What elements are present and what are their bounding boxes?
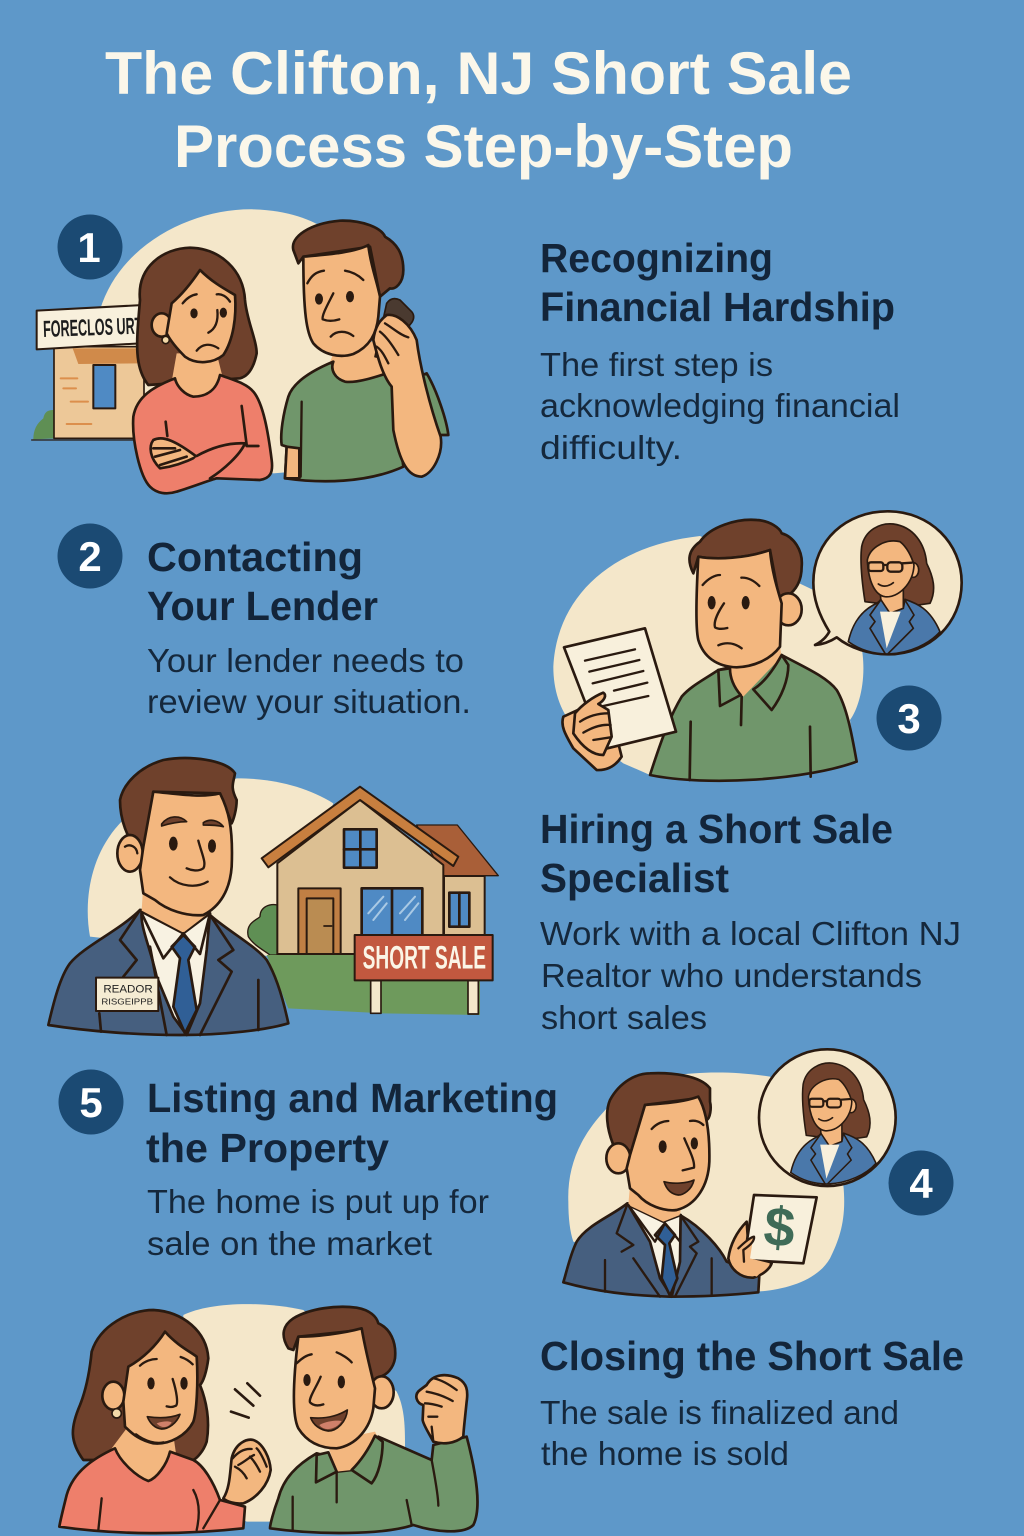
badge: step 2: 2 bbox=[78, 533, 102, 580]
house with short sale sign bbox=[248, 787, 498, 1015]
text block: step 3: short sales bbox=[541, 999, 707, 1036]
badge: step 4: 4 bbox=[909, 1160, 933, 1207]
text block: step 3: Realtor who understands bbox=[541, 957, 922, 994]
icon: dollar sheet in hand bbox=[728, 1195, 817, 1278]
text block: step 3: Work with a local Clifton NJ bbox=[540, 915, 961, 952]
text block: step 2 bbox=[147, 534, 471, 720]
icon: dollar sheet in hand: $ bbox=[761, 1195, 797, 1259]
text block: step 3: Hiring a Short Sale bbox=[540, 806, 893, 852]
badge: step 1: 1 bbox=[77, 224, 101, 271]
title bbox=[105, 40, 852, 180]
badge: step 1 bbox=[58, 214, 122, 280]
man on the phone bbox=[281, 221, 448, 481]
text block: step 1: Recognizing bbox=[540, 235, 773, 281]
speech bubble with specialist bbox=[813, 511, 962, 654]
text block: step 3: Specialist bbox=[540, 855, 729, 901]
badge: step 5 bbox=[58, 1070, 124, 1134]
illustration: man reading a letter with speech bubble bbox=[553, 511, 962, 781]
man bbox=[270, 1307, 478, 1533]
text block: listing: sale on the market bbox=[147, 1225, 432, 1262]
text block: step 1: difficulty. bbox=[540, 429, 682, 466]
badge: step 2 bbox=[58, 524, 122, 588]
text block: closing: Closing the Short Sale bbox=[540, 1333, 964, 1379]
badge: step 3: 3 bbox=[897, 695, 921, 742]
agent bbox=[563, 1073, 759, 1297]
name badge: RISGEIPPB bbox=[101, 996, 153, 1006]
fist bbox=[223, 1440, 271, 1504]
text block: closing: The sale is finalized and bbox=[540, 1394, 899, 1431]
illustration: celebrating couple bbox=[59, 1304, 478, 1533]
house with short sale sign: SHORT SALE bbox=[363, 940, 486, 976]
text block: listing: The home is put up for bbox=[147, 1183, 489, 1220]
text block: step 2: Contacting bbox=[147, 534, 363, 580]
text block: listing: Listing and Marketing bbox=[147, 1075, 558, 1121]
badge: step 3 bbox=[876, 686, 942, 750]
illustration: agent holding dollar sheet with bubble bbox=[563, 1049, 896, 1297]
woman bbox=[59, 1310, 271, 1533]
icon: letter in hand bbox=[562, 628, 676, 770]
name badge: READOR bbox=[103, 984, 153, 996]
text block: closing bbox=[540, 1333, 964, 1472]
text block: step 3 bbox=[540, 806, 961, 1036]
text block: step 1 bbox=[540, 235, 900, 466]
woman with crossed arms bbox=[133, 248, 272, 493]
text block: step 1: The first step is bbox=[540, 346, 773, 383]
text block: step 1: acknowledging financial bbox=[540, 387, 900, 424]
icon: foreclosure house bbox=[32, 305, 144, 440]
text block: closing: the home is sold bbox=[541, 1435, 789, 1472]
title: Process Step-by-Step bbox=[174, 113, 793, 180]
text block: step 2: Your lender needs to bbox=[147, 642, 464, 679]
realtor bbox=[48, 758, 288, 1035]
text block: listing bbox=[146, 1075, 558, 1262]
badge: step 4 bbox=[888, 1150, 954, 1216]
name badge bbox=[96, 978, 158, 1011]
raised fist bbox=[416, 1375, 467, 1443]
icon: foreclosure house: FORECLOS URT bbox=[43, 313, 143, 342]
text block: listing: the Property bbox=[146, 1125, 389, 1171]
illustration: realtor and short sale house bbox=[48, 758, 498, 1035]
badge: step 5: 5 bbox=[79, 1079, 103, 1126]
man bbox=[650, 520, 857, 781]
text block: step 2: review your situation. bbox=[147, 683, 471, 720]
spark lines bbox=[231, 1383, 260, 1418]
illustration: worried couple and foreclosure house bbox=[32, 209, 448, 493]
title: The Clifton, NJ Short Sale bbox=[105, 40, 852, 107]
text block: step 1: Financial Hardship bbox=[540, 284, 895, 330]
speech bubble with specialist bbox=[759, 1049, 896, 1186]
text block: step 2: Your Lender bbox=[147, 583, 378, 629]
